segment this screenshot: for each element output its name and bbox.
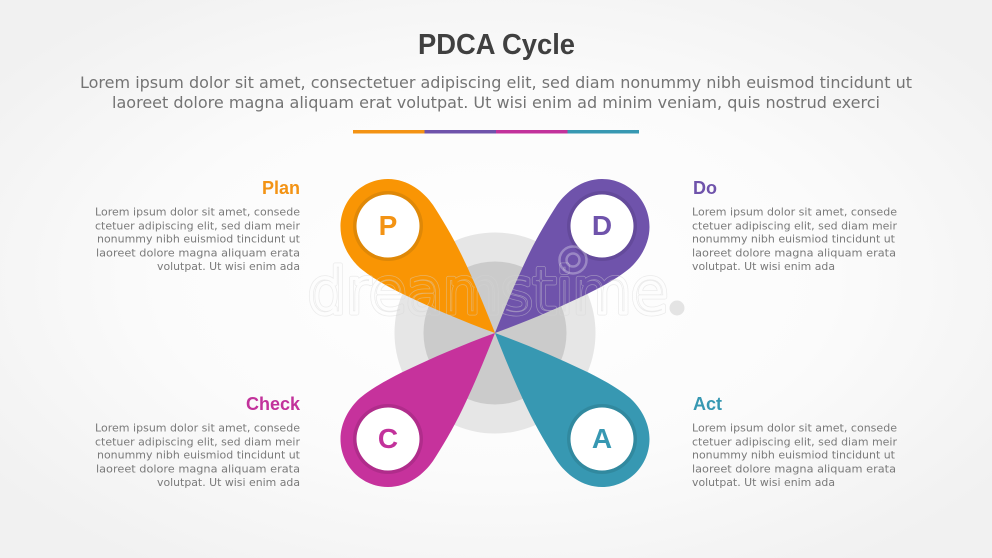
petal: P: P bbox=[379, 210, 397, 241]
text block: Check: ctetuer adipiscing elit, sed diam meir bbox=[95, 436, 300, 448]
petal: C: C bbox=[378, 423, 398, 454]
petal: A bbox=[495, 333, 650, 487]
text block: Plan bbox=[95, 178, 301, 273]
concentric background circles bbox=[394, 232, 596, 434]
text block: Do: nonummy nibh euismiod tincidunt ut bbox=[692, 232, 896, 246]
text block: Act bbox=[692, 394, 897, 489]
text block: Do: Lorem ipsum dolor sit amet, consede bbox=[692, 206, 897, 218]
text block: Act: Act bbox=[693, 394, 722, 414]
text block: Check: volutpat. Ut wisi enim ada bbox=[157, 476, 300, 489]
petal: A: A bbox=[592, 423, 612, 454]
petal: D bbox=[495, 179, 650, 333]
text block: Plan: nonummy nibh euismiod tincidunt ut bbox=[97, 232, 301, 246]
text block: Act: volutpat. Ut wisi enim ada bbox=[692, 476, 835, 489]
watermark: dreamstime bbox=[308, 255, 668, 328]
text block: Do: ctetuer adipiscing elit, sed diam meir bbox=[692, 220, 897, 232]
text block: Do: laoreet dolore magna aliquam erata bbox=[692, 246, 896, 260]
text block: Plan: Lorem ipsum dolor sit amet, consede bbox=[95, 206, 300, 218]
text block: Plan: ctetuer adipiscing elit, sed diam meir bbox=[95, 220, 300, 232]
colored divider bar bbox=[353, 130, 639, 134]
text block: Check: laoreet dolore magna aliquam erata bbox=[96, 462, 300, 476]
text block: Plan: volutpat. Ut wisi enim ada bbox=[157, 260, 300, 273]
subtitle text: laoreet dolore magna aliquam erat volutpat. Ut wisi enim ad minim veniam, quis nostrud exerci bbox=[112, 93, 880, 112]
text block: Do: volutpat. Ut wisi enim ada bbox=[692, 260, 835, 273]
text block: Do: Do bbox=[693, 178, 717, 198]
text block: Do bbox=[692, 178, 897, 273]
subtitle text: Lorem ipsum dolor sit amet, consectetuer adipiscing elit, sed diam nonummy nibh euismod tincidunt ut bbox=[80, 73, 912, 92]
petal: D: D bbox=[592, 210, 612, 241]
petal: C bbox=[340, 333, 495, 487]
text block: Check: Lorem ipsum dolor sit amet, consede bbox=[95, 422, 300, 434]
text block: Check bbox=[95, 394, 301, 489]
text block: Check: nonummy nibh euismiod tincidunt ut bbox=[97, 448, 301, 462]
text block: Plan: laoreet dolore magna aliquam erata bbox=[96, 246, 300, 260]
text block: Act: ctetuer adipiscing elit, sed diam meir bbox=[692, 436, 897, 448]
subtitle text bbox=[80, 73, 912, 112]
text block: Act: nonummy nibh euismiod tincidunt ut bbox=[692, 448, 896, 462]
text block: Plan: Plan bbox=[262, 178, 300, 198]
text block: Check: Check bbox=[246, 394, 301, 414]
title: PDCA Cycle bbox=[418, 29, 575, 61]
text block: Act: Lorem ipsum dolor sit amet, consede bbox=[692, 422, 897, 434]
text block: Act: laoreet dolore magna aliquam erata bbox=[692, 462, 896, 476]
petal: P bbox=[340, 179, 495, 333]
